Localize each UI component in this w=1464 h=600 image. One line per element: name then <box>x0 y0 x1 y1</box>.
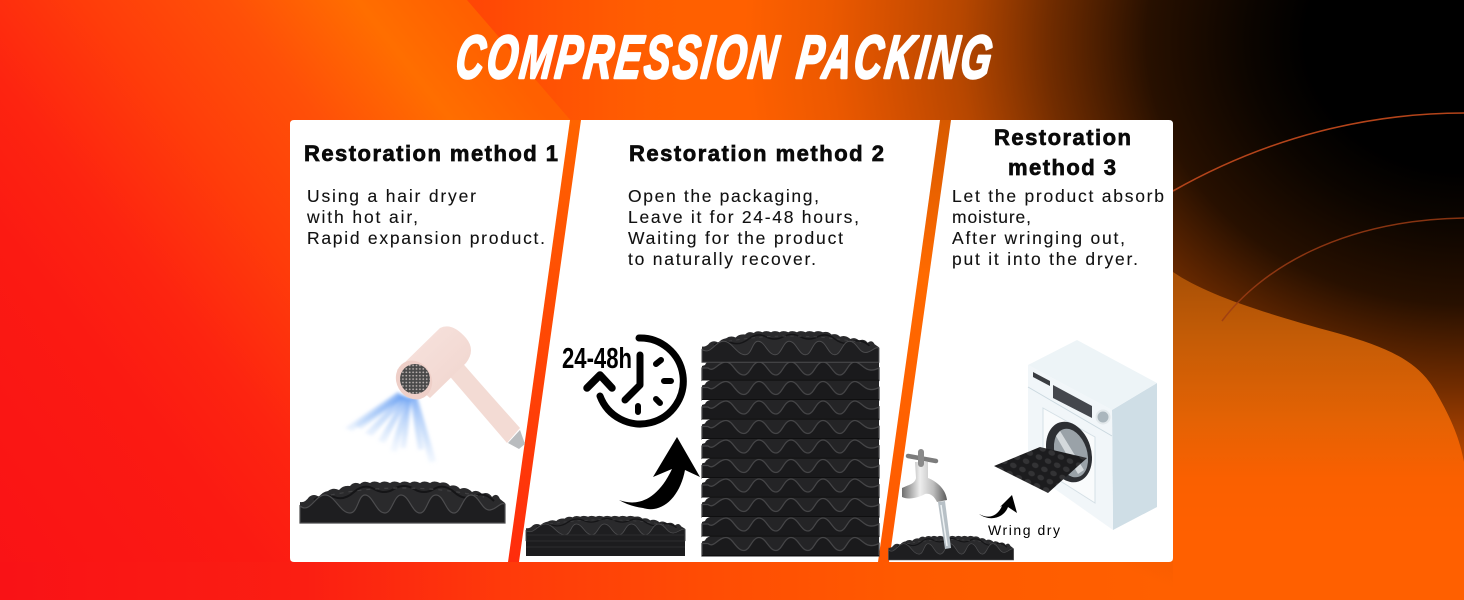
panel: restoration method 1 <box>290 120 570 562</box>
text block: method 1: Using a hair dryer <box>307 186 476 206</box>
icon: 24-48h clock: 24-48h <box>562 343 632 375</box>
heading: method 1: Restoration method 1 <box>304 141 558 166</box>
icon: hair dryer <box>345 326 525 463</box>
heading: method 3: method 3 <box>1008 155 1116 180</box>
foam: sheet entering the machine <box>994 447 1087 493</box>
heading: method 3 <box>994 125 1131 180</box>
arrow: stack expansion <box>619 437 700 509</box>
foam: expanded stack <box>702 331 879 556</box>
panel: restoration method 2 <box>519 120 940 562</box>
icon: 24-48h clock <box>562 338 683 424</box>
text block: method 2: Leave it for 24-48 hours, <box>628 207 859 227</box>
text block: method 2 <box>628 186 859 269</box>
text block: method 3: After wringing out, <box>952 228 1125 248</box>
icon: washing machine <box>1028 340 1157 530</box>
panel: restoration method 3 <box>888 120 1173 562</box>
text block: method 3 <box>952 186 1164 269</box>
text block: method 3: put it into the dryer. <box>952 249 1138 269</box>
foam: compressed stack <box>526 516 685 556</box>
heading: method 2: Restoration method 2 <box>629 141 884 166</box>
foam slab: method 1 <box>300 482 505 523</box>
arrow: wring dry <box>979 495 1017 518</box>
title: COMPRESSION PACKING <box>452 23 999 91</box>
text block: method 1: Rapid expansion product. <box>307 228 545 248</box>
text block: method 1: with hot air, <box>306 207 418 227</box>
text block: method 3: Let the product absorb <box>952 186 1164 206</box>
text block: method 2: Open the packaging, <box>628 186 819 206</box>
text block: method 1 <box>306 186 545 248</box>
text block: method 3: moisture, <box>952 207 1031 227</box>
icon: water tap <box>902 452 951 549</box>
heading: method 3: Restoration <box>994 125 1131 150</box>
text block: method 2: to naturally recover. <box>628 249 816 269</box>
text block: method 2: Waiting for the product <box>628 228 843 248</box>
label: wring dry: Wring dry <box>988 522 1060 538</box>
foam slab: method 3 <box>888 536 1014 560</box>
